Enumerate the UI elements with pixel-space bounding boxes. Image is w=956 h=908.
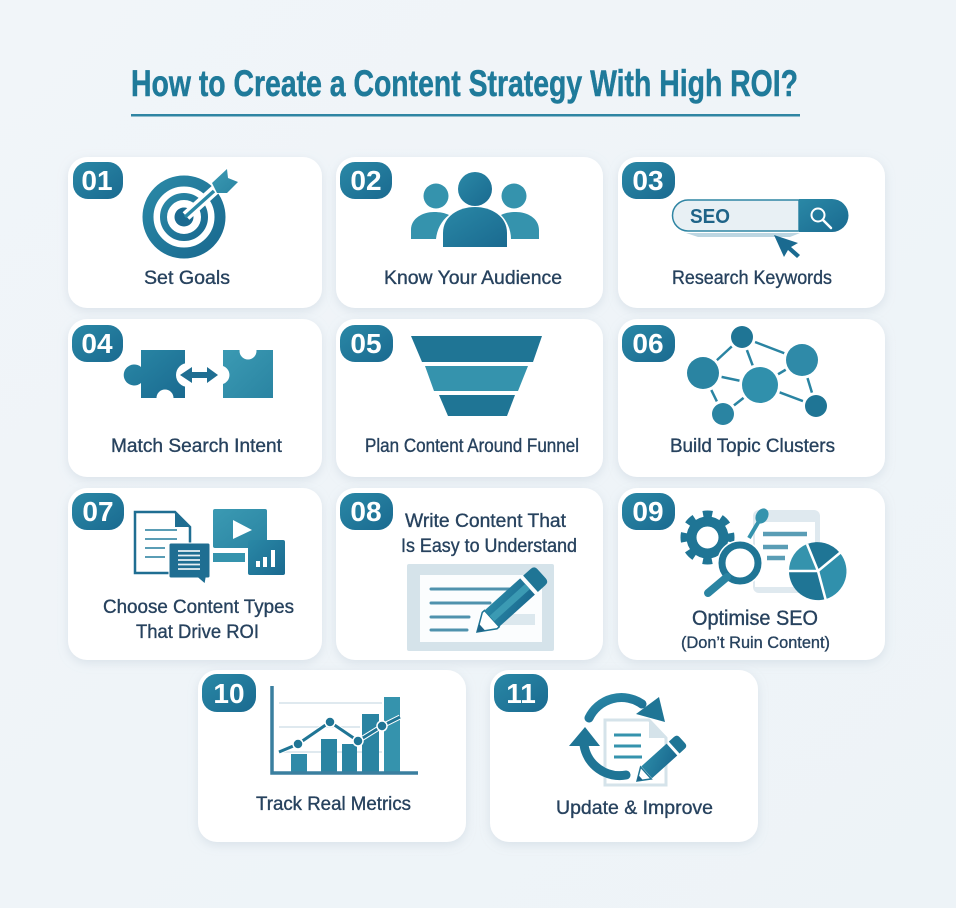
icon: document with pencil [407, 564, 554, 651]
panel: 11 Update & Improve [490, 670, 758, 842]
panel: 03 Research Keywords [618, 157, 885, 308]
badge 07: 07 [82, 496, 114, 527]
panel: 06 Build Topic Clusters [618, 319, 885, 477]
label: Match Search Intent [111, 436, 283, 457]
label: Is Easy to Understand [401, 536, 577, 557]
badge 08 [340, 493, 393, 530]
label: Optimise SEO [692, 607, 818, 630]
icon: search bar with cursor [672, 199, 848, 258]
label: (Don’t Ruin Content) [681, 633, 830, 652]
badge 11 [494, 674, 548, 712]
label [103, 597, 294, 643]
panel: 01 Set Goals [68, 157, 322, 308]
icon: puzzle pieces with arrow [124, 342, 273, 406]
label: Write Content That [405, 511, 567, 532]
badge 05 [340, 325, 393, 362]
badge 07 [72, 493, 124, 530]
label [401, 511, 577, 557]
badge 04: 04 [81, 328, 113, 359]
icon: refresh arrows with document and pencil [569, 697, 688, 787]
icon: funnel [411, 336, 542, 416]
label: Update & Improve [556, 798, 713, 819]
badge 03 [622, 162, 675, 199]
badge 04 [72, 325, 123, 362]
badge 06 [622, 325, 675, 362]
badge 06: 06 [632, 328, 664, 359]
badge 11: 11 [506, 678, 536, 709]
icon: bar and line chart [272, 686, 418, 773]
label [681, 607, 830, 652]
label: Set Goals [144, 268, 230, 289]
label: Track Real Metrics [256, 794, 411, 815]
panel: 08 Write Content [336, 488, 603, 660]
icon: search bar with cursor: SEO [690, 206, 730, 228]
panel: 05 Plan Content Around Funnel [336, 319, 603, 477]
badge 05: 05 [350, 328, 382, 359]
badge 10: 10 [213, 678, 245, 709]
icon: gear, magnifier, document and pie [684, 506, 846, 601]
badge 09 [622, 493, 675, 530]
badge 03: 03 [632, 165, 664, 196]
panel: 07 Choose Content Types [68, 488, 322, 660]
label: Plan Content Around Funnel [365, 436, 579, 457]
label: Choose Content Types [103, 597, 294, 618]
icon: audience [411, 172, 539, 247]
badge 09: 09 [632, 496, 664, 527]
badge 02: 02 [350, 165, 382, 196]
badge 02 [340, 162, 392, 199]
panel: 02 Know Your Audience [336, 157, 603, 308]
icon: network of topic nodes [687, 326, 827, 425]
badge 01 [73, 162, 123, 199]
label: Build Topic Clusters [670, 436, 835, 457]
badge 01: 01 [81, 165, 113, 196]
badge 10 [202, 674, 256, 712]
panel: 04 Match Search Intent [68, 319, 322, 477]
label: Research Keywords [672, 268, 832, 289]
panel: 09 Optimise SEO [618, 488, 885, 660]
panel: 10 Track Real Metrics [198, 670, 466, 842]
label: Know Your Audience [384, 268, 562, 289]
icon: target with arrow [148, 169, 238, 253]
badge 08: 08 [350, 496, 382, 527]
icon: content types [135, 509, 285, 584]
label: That Drive ROI [136, 622, 259, 643]
